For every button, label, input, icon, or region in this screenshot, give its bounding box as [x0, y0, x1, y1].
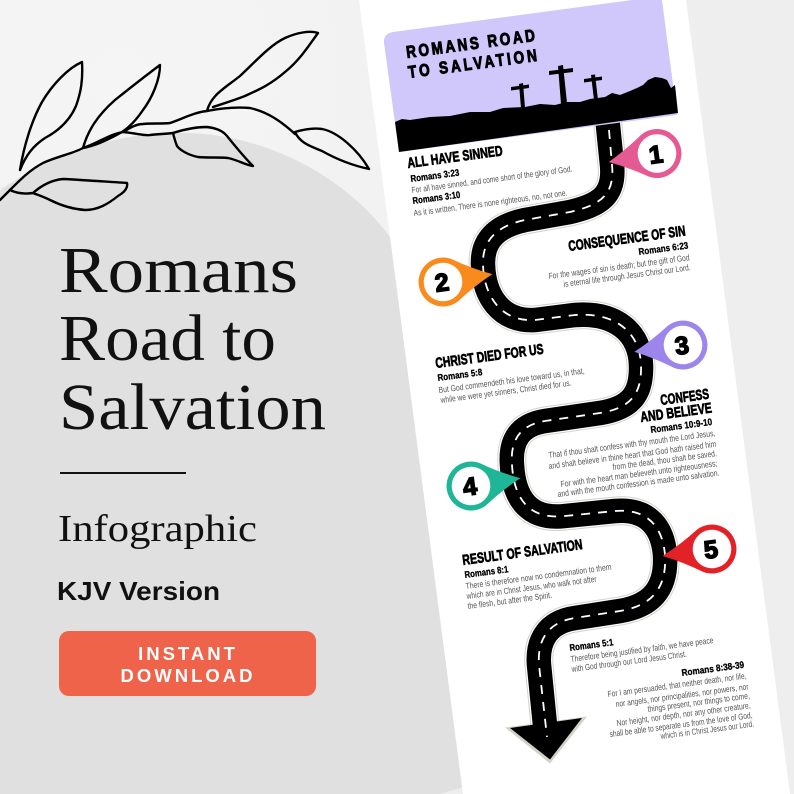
section: romans 5:1: Therefore being justified by faith, we have peace: [570, 635, 714, 664]
section: all have sinned: [406, 143, 573, 218]
pin 1: [604, 125, 685, 186]
hill silhouette with three crosses: [395, 65, 678, 152]
section: christ died for us: But God commendeth his love toward us, in that,: [438, 366, 585, 395]
section: all have sinned: ALL HAVE SINNED: [406, 143, 504, 172]
button: instant download: INSTANT: [138, 643, 238, 664]
section: romans 8:38-39: which is in Christ Jesus our Lord.: [659, 719, 754, 741]
title text: TO SALVATION: [407, 47, 538, 82]
icon: leaf branch: [0, 32, 369, 210]
road edge: [483, 116, 665, 735]
section: romans 8:38-39: nor angels, nor principalities, nor powers, nor: [615, 681, 749, 709]
title: Romans: [59, 234, 298, 307]
section: romans 8:38-39: things present, nor things to come,: [647, 690, 750, 714]
section: all have sinned: Romans 3:10: [412, 190, 461, 207]
section: christ died for us: while we were yet sinners, Christ died for us.: [439, 378, 572, 405]
lavender sky: [384, 0, 677, 152]
section: confess and believe: from the dead, thou shalt be saved.: [612, 448, 717, 472]
poster sheet: [359, 0, 790, 794]
section: result of salvation: There is therefore now no condemnation to them: [465, 562, 612, 591]
arrow head edge: [505, 716, 587, 764]
pin 1: 1: [647, 140, 665, 170]
title: Road to: [59, 302, 276, 375]
subtitle: Infographic: [58, 508, 257, 550]
section: confess and believe: CONFESS: [659, 387, 710, 409]
pin 3: [631, 317, 711, 376]
road: [483, 116, 665, 764]
section: confess and believe: Romans 10:9-10: [650, 417, 713, 436]
section: romans 8:38-39: Nor height, nor depth, nor any other creature,: [616, 700, 751, 728]
version label: KJV Version: [57, 576, 220, 606]
pin 2: 2: [433, 268, 451, 298]
arrow head: [510, 718, 582, 760]
section: consequence of sin: is eternal life through Jesus Christ our Lord.: [563, 262, 691, 289]
pin 5: 5: [702, 535, 720, 565]
section: confess and believe: and with the mouth confession is made unto salvation.: [557, 468, 720, 499]
section: all have sinned: As it is written, There is none righteous, no, not one.: [413, 188, 568, 218]
section: consequence of sin: Romans 6:23: [638, 240, 689, 258]
section: romans 5:1: with God through our Lord Jesus Christ.: [570, 649, 687, 674]
section: christ died for us: Romans 5:8: [437, 367, 483, 384]
section: all have sinned: Romans 3:23: [410, 168, 460, 185]
section: christ died for us: CHRIST DIED FOR US: [434, 342, 545, 372]
section: christ died for us: [434, 342, 585, 405]
section: confess and believe: That if thou shalt confess with thy mouth the Lord Jesus,: [548, 428, 716, 460]
pin 3: 3: [673, 331, 691, 361]
button: instant download: [59, 631, 316, 696]
road edge gap: [483, 116, 665, 735]
pin 4: 4: [461, 472, 479, 502]
section: consequence of sin: For the wages of sin is death; but the gift of God: [548, 252, 690, 281]
section: confess and believe: [548, 387, 720, 499]
section: result of salvation: RESULT OF SALVATION: [461, 537, 583, 569]
button: instant download: DOWNLOAD: [121, 665, 255, 686]
section: result of salvation: [461, 537, 612, 611]
title text: [405, 27, 538, 82]
section: romans 5:1: Romans 5:1: [569, 637, 615, 654]
section: all have sinned: For all have sinned, and come short of the glory of God.: [411, 164, 573, 195]
pin 4: [443, 454, 524, 514]
section: romans 8:38-39: [607, 660, 754, 741]
section: romans 8:38-39: shall be able to separate us from the love of God,: [609, 710, 753, 739]
pin 2: [415, 250, 496, 310]
section: result of salvation: Romans 8:1: [464, 564, 510, 581]
title text: ROMANS ROAD: [405, 27, 536, 62]
road surface: [483, 116, 665, 735]
grey arch panel: [0, 133, 470, 794]
section: confess and believe: For with the heart man believeth unto righteousness;: [560, 458, 718, 489]
section: confess and believe: and shalt believe in thine heart that God hath raised him: [548, 439, 717, 471]
title: [59, 234, 326, 444]
section: result of salvation: the flesh, but after the Spirit.: [467, 590, 553, 611]
pin 5: [659, 521, 740, 580]
section: romans 8:38-39: Romans 8:38-39: [681, 660, 745, 679]
section: romans 8:38-39: For I am persuaded, that neither death, nor life,: [607, 671, 747, 699]
section: result of salvation: which are in Christ Jesus, who walk not after: [465, 574, 597, 601]
section: confess and believe: AND BELIEVE: [639, 401, 713, 426]
section: consequence of sin: [548, 223, 691, 289]
title: Salvation: [59, 371, 326, 444]
section: consequence of sin: CONSEQUENCE OF SIN: [567, 223, 686, 255]
lane dashes: [483, 130, 665, 737]
header panel: [384, 0, 678, 152]
